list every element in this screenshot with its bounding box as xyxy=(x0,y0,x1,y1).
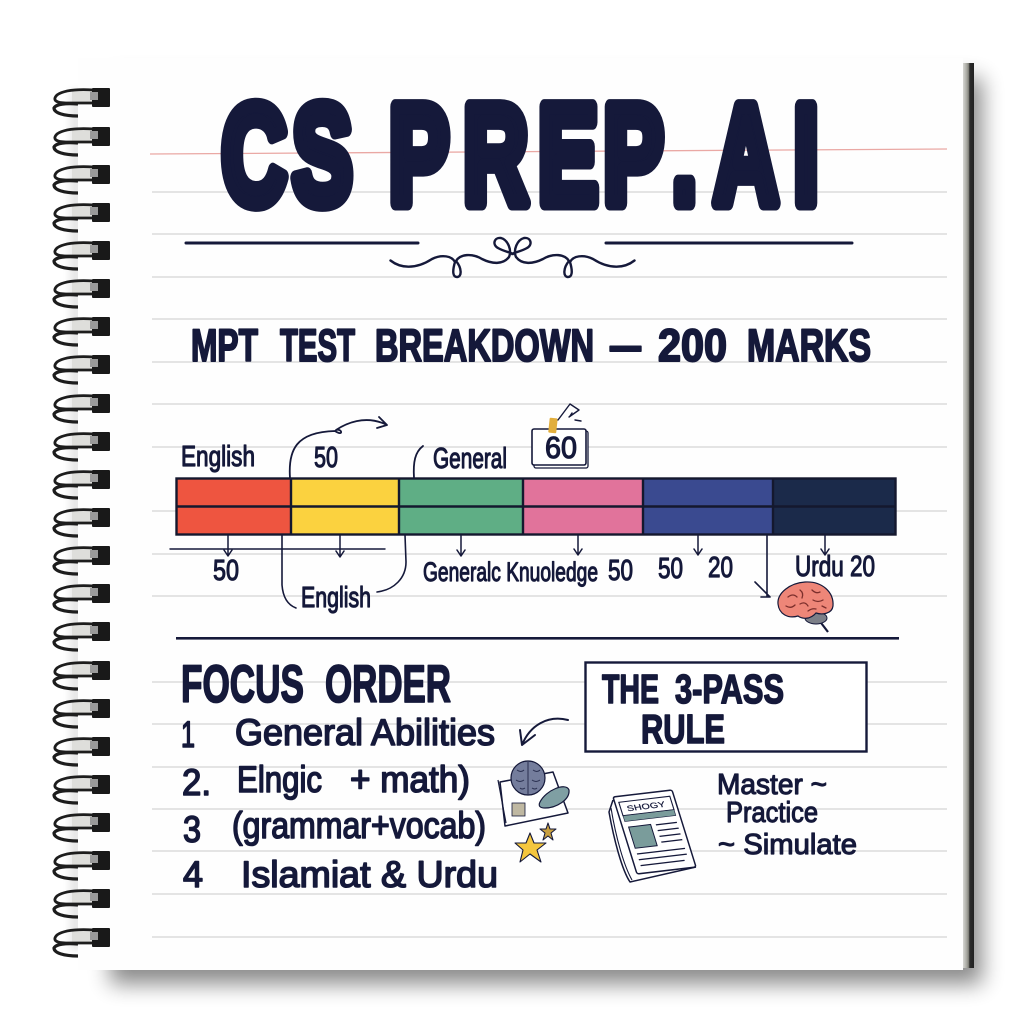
bar label: 20: 20 xyxy=(708,552,733,584)
icon: book with brain and stars xyxy=(498,761,569,862)
bar label: General Knowledge: Generalc Knuoledge xyxy=(423,557,598,587)
section divider xyxy=(176,637,899,640)
item 2: + math) xyxy=(350,759,470,800)
item 2: 2. xyxy=(182,762,211,803)
item 2 xyxy=(182,759,470,803)
notebook shadow xyxy=(70,78,982,984)
item 4: Islamiat & Urdu xyxy=(241,854,498,895)
section heading: test breakdown: TEST xyxy=(280,320,355,371)
bar label: 50 top: 50 xyxy=(314,442,338,474)
bracket above General xyxy=(414,446,423,478)
icon: newspaper: SHOGY xyxy=(626,800,667,813)
callout box: the 3-pass rule: THE xyxy=(602,666,659,712)
back pages edge xyxy=(962,63,974,968)
callout box: the 3-pass rule: 3-PASS xyxy=(675,666,784,712)
bar label: English top: English xyxy=(181,441,255,473)
ruled paper lines xyxy=(150,149,947,937)
title ornament xyxy=(186,238,852,277)
three-pass steps text xyxy=(717,769,857,861)
icon: note card with 60: 60 xyxy=(545,430,577,465)
segmented bar chart xyxy=(176,478,896,535)
item 3: (grammar+vocab) xyxy=(232,805,486,846)
item 2: Elngic xyxy=(237,759,322,800)
icon: note card with 60 xyxy=(532,404,588,468)
arrow from callout xyxy=(520,719,568,745)
curved arrow above bar xyxy=(290,417,387,478)
arrow to brain xyxy=(755,535,770,597)
bar label: 50: 50 xyxy=(608,555,633,587)
item 3 xyxy=(183,805,486,850)
curved connector right xyxy=(377,535,406,592)
item 3: 3 xyxy=(183,809,201,850)
bar label: General top: General xyxy=(433,443,507,475)
section heading: test breakdown: BREAKDOWN xyxy=(375,320,594,371)
bar label: 50: 50 xyxy=(658,553,683,585)
spiral binding xyxy=(54,88,110,956)
title: CS PREP.AI xyxy=(0,77,818,233)
bar label: Urdu 20: Urdu 20 xyxy=(795,551,875,583)
focus order heading: FOCUS xyxy=(181,655,304,714)
section heading: test breakdown: — xyxy=(610,320,641,371)
item 4: 4 xyxy=(183,854,203,895)
panel: focus order xyxy=(181,655,498,895)
icon: brain xyxy=(778,582,833,632)
focus order heading xyxy=(181,655,451,714)
three-pass steps text: Master ~ xyxy=(717,769,827,801)
three-pass steps text: Practice xyxy=(726,797,818,829)
callout box: the 3-pass rule: RULE xyxy=(641,706,725,752)
icon: newspaper xyxy=(609,790,696,882)
bar label: English lower: English xyxy=(301,582,371,614)
section heading: test breakdown xyxy=(191,320,871,371)
callout box: the 3-pass rule xyxy=(586,662,866,752)
notebook page xyxy=(78,58,963,970)
focus order heading: ORDER xyxy=(325,655,451,714)
curved connector left xyxy=(282,535,296,608)
bar label: 50 under English: 50 xyxy=(213,555,239,587)
section heading: test breakdown: MARKS xyxy=(747,320,871,371)
item 1: 1 xyxy=(181,714,195,755)
underline with arrows below bar xyxy=(170,535,829,557)
item 1: General Abilities xyxy=(235,712,495,753)
three-pass steps text: ~ Simulate xyxy=(718,829,857,861)
section heading: test breakdown: 200 xyxy=(658,320,727,371)
section heading: test breakdown: MPT xyxy=(191,320,258,371)
